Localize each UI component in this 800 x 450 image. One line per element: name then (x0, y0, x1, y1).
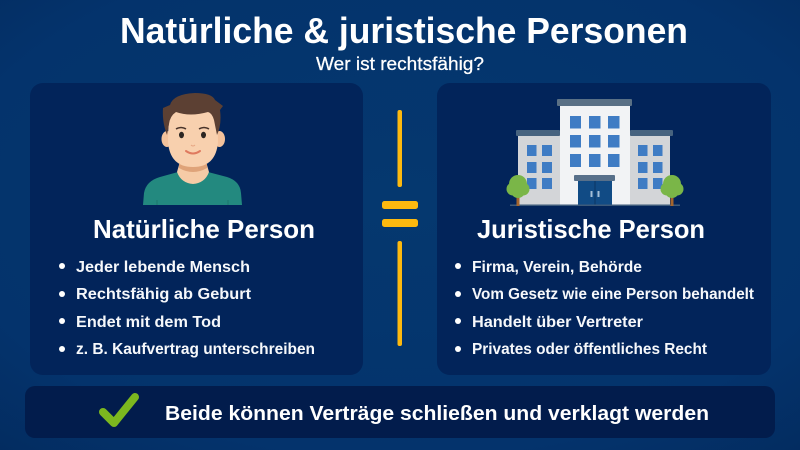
bullet list: juristische Person: Vom Gesetz wie eine Person behandelt (472, 286, 754, 303)
bullet list: juristische Person: Privates oder öffentliches Recht (472, 341, 707, 358)
icon: person (143, 93, 242, 205)
divider: equals sign with vertical lines (382, 110, 418, 346)
subtitle: Wer ist rechtsfähig? (316, 54, 484, 74)
heading: juristische Person: Juristische Person (477, 214, 705, 244)
icon: tree left (506, 175, 530, 206)
title: Natürliche & juristische Personen (120, 10, 688, 51)
callout bar (25, 386, 775, 438)
bullet list: natürliche Person (59, 259, 315, 358)
icon: building (506, 99, 684, 206)
bullet list: natürliche Person: Rechtsfähig ab Geburt (76, 286, 251, 303)
panel: juristische Person (437, 83, 771, 375)
bullet list: natürliche Person: z. B. Kaufvertrag unterschreiben (76, 341, 315, 358)
bullet list: juristische Person (455, 259, 754, 358)
bullet list: juristische Person: Firma, Verein, Behörde (472, 259, 642, 276)
heading: natürliche Person: Natürliche Person (93, 214, 315, 244)
icon: check mark (103, 397, 135, 423)
bullet list: natürliche Person: Jeder lebende Mensch (76, 259, 250, 276)
icon: tree right (660, 175, 684, 206)
panel: natürliche Person (30, 83, 363, 375)
bullet list: juristische Person: Handelt über Vertreter (472, 314, 643, 331)
bullet list: natürliche Person: Endet mit dem Tod (76, 314, 221, 331)
callout text: Beide können Verträge schließen und verklagt werden (165, 403, 709, 425)
